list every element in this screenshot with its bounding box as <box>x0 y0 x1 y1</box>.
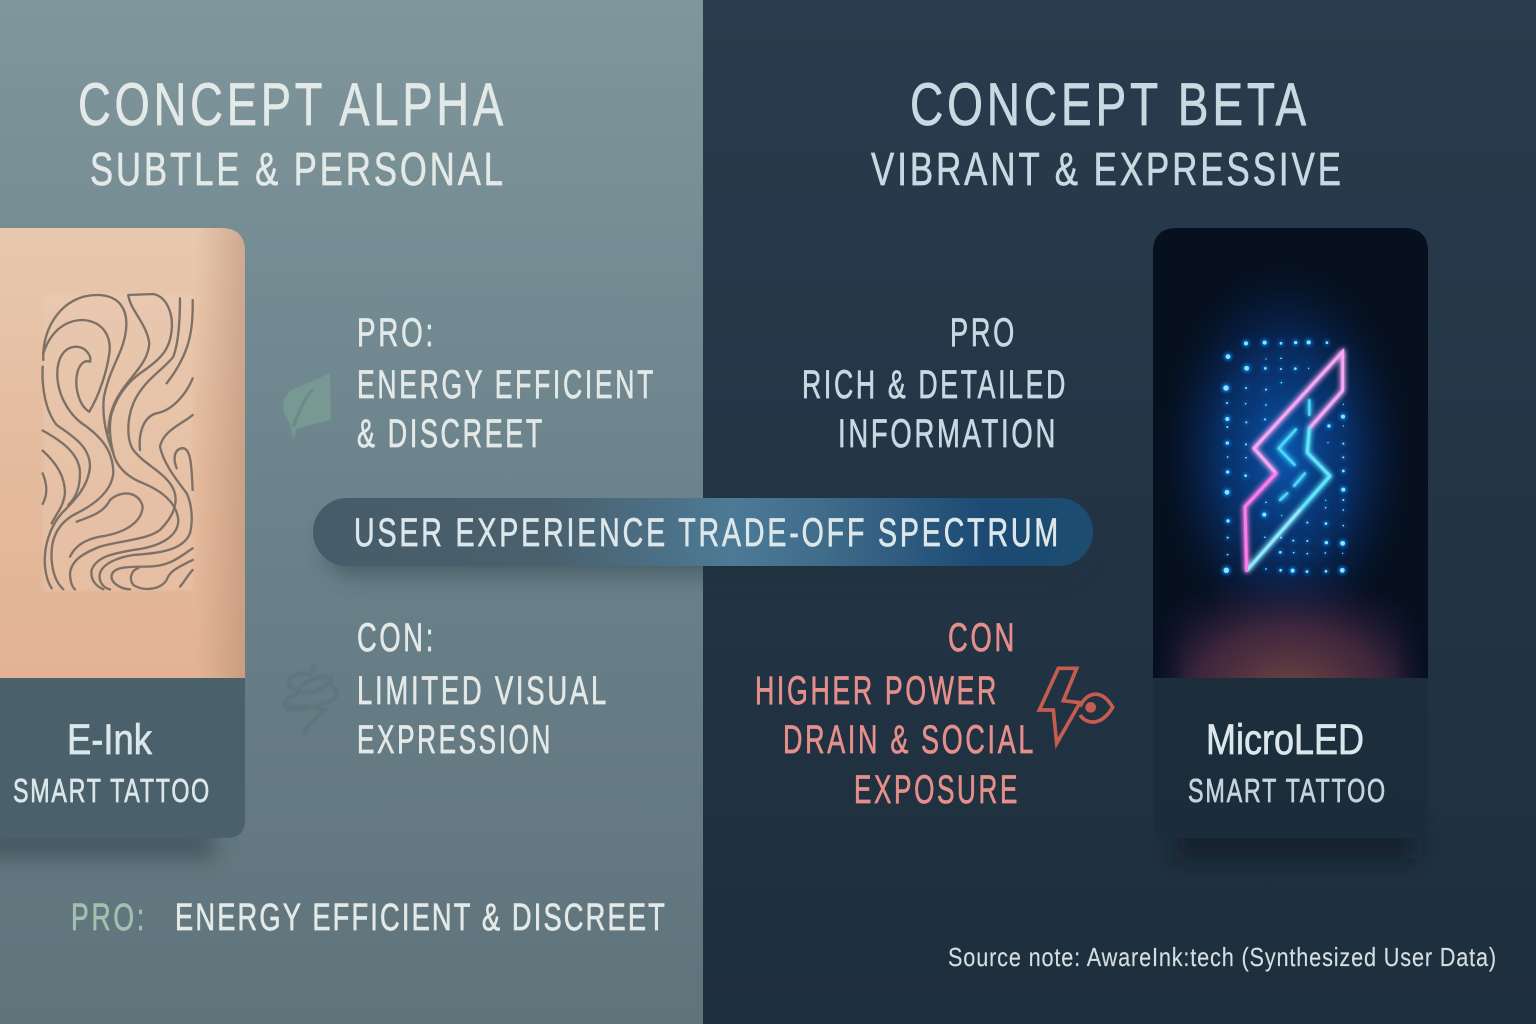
heading: concept beta: VIBRANT & EXPRESSIVE <box>871 143 1344 195</box>
text: alpha con: CON: <box>357 616 436 660</box>
text: alpha pro <box>357 311 656 456</box>
label: e-ink smart tattoo: E-Ink <box>67 716 152 764</box>
panel: concept beta background <box>703 0 1536 1024</box>
text: beta con: CON <box>948 616 1017 660</box>
tattoo patch <box>43 294 193 590</box>
panel: concept alpha background <box>0 0 703 1024</box>
text: alpha con <box>357 616 609 762</box>
warm skin glow <box>1164 584 1416 678</box>
label: e-ink smart tattoo <box>13 716 211 809</box>
text: beta pro: INFORMATION <box>838 412 1058 456</box>
label: microled smart tattoo <box>1188 716 1387 809</box>
panel: e-ink smart tattoo card <box>0 228 245 859</box>
text: beta con: EXPOSURE <box>854 768 1020 812</box>
heading: concept beta <box>871 71 1344 195</box>
label: e-ink smart tattoo: SMART TATTOO <box>13 772 211 809</box>
text: alpha con: EXPRESSION <box>357 718 553 762</box>
label: microled smart tattoo: SMART TATTOO <box>1188 772 1387 809</box>
heading: concept alpha: CONCEPT ALPHA <box>78 71 507 138</box>
label: microled smart tattoo: MicroLED <box>1206 716 1364 764</box>
text: beta pro: RICH & DETAILED <box>802 363 1068 407</box>
icon: bolt with eye <box>1039 668 1113 743</box>
skin panel <box>0 228 245 678</box>
screen edge shading <box>1153 560 1428 678</box>
text: beta con <box>755 616 1036 812</box>
heading: concept alpha <box>78 71 507 195</box>
text: alpha pro: & DISCREET <box>357 412 545 456</box>
heading: concept beta: CONCEPT BETA <box>910 71 1310 138</box>
led glow <box>1172 284 1398 612</box>
text: beta con: HIGHER POWER <box>755 669 999 713</box>
led dot matrix <box>1223 340 1345 573</box>
callout: user experience trade-off spectrum: USER EXPERIENCE TRADE-OFF SPECTRUM <box>354 511 1061 555</box>
callout: user experience trade-off spectrum <box>313 498 1093 576</box>
label card: microled <box>1153 678 1428 838</box>
text: alpha pro: ENERGY EFFICIENT <box>357 363 656 407</box>
icon: neon lightning bolt <box>1245 352 1343 571</box>
icon: leaf <box>283 373 331 440</box>
footer: energy efficient summary <box>71 897 667 939</box>
text: beta pro <box>802 311 1068 456</box>
footer: energy efficient summary: PRO: <box>71 897 147 939</box>
text: beta con: DRAIN & SOCIAL <box>783 718 1036 762</box>
footer: energy efficient summary: ENERGY EFFICIENT & DISCREET <box>175 897 667 939</box>
illustration: e-ink contour tattoo <box>42 294 193 589</box>
heading: concept alpha: SUBTLE & PERSONAL <box>90 143 506 195</box>
text: alpha con: LIMITED VISUAL <box>357 669 609 713</box>
panel: microled smart tattoo card <box>1120 228 1460 859</box>
icon: faint coiled snake <box>285 667 336 733</box>
text: alpha pro: PRO: <box>357 311 436 355</box>
text: beta pro: PRO <box>950 311 1017 355</box>
label card: e-ink <box>0 678 245 838</box>
screen panel <box>1153 228 1428 678</box>
